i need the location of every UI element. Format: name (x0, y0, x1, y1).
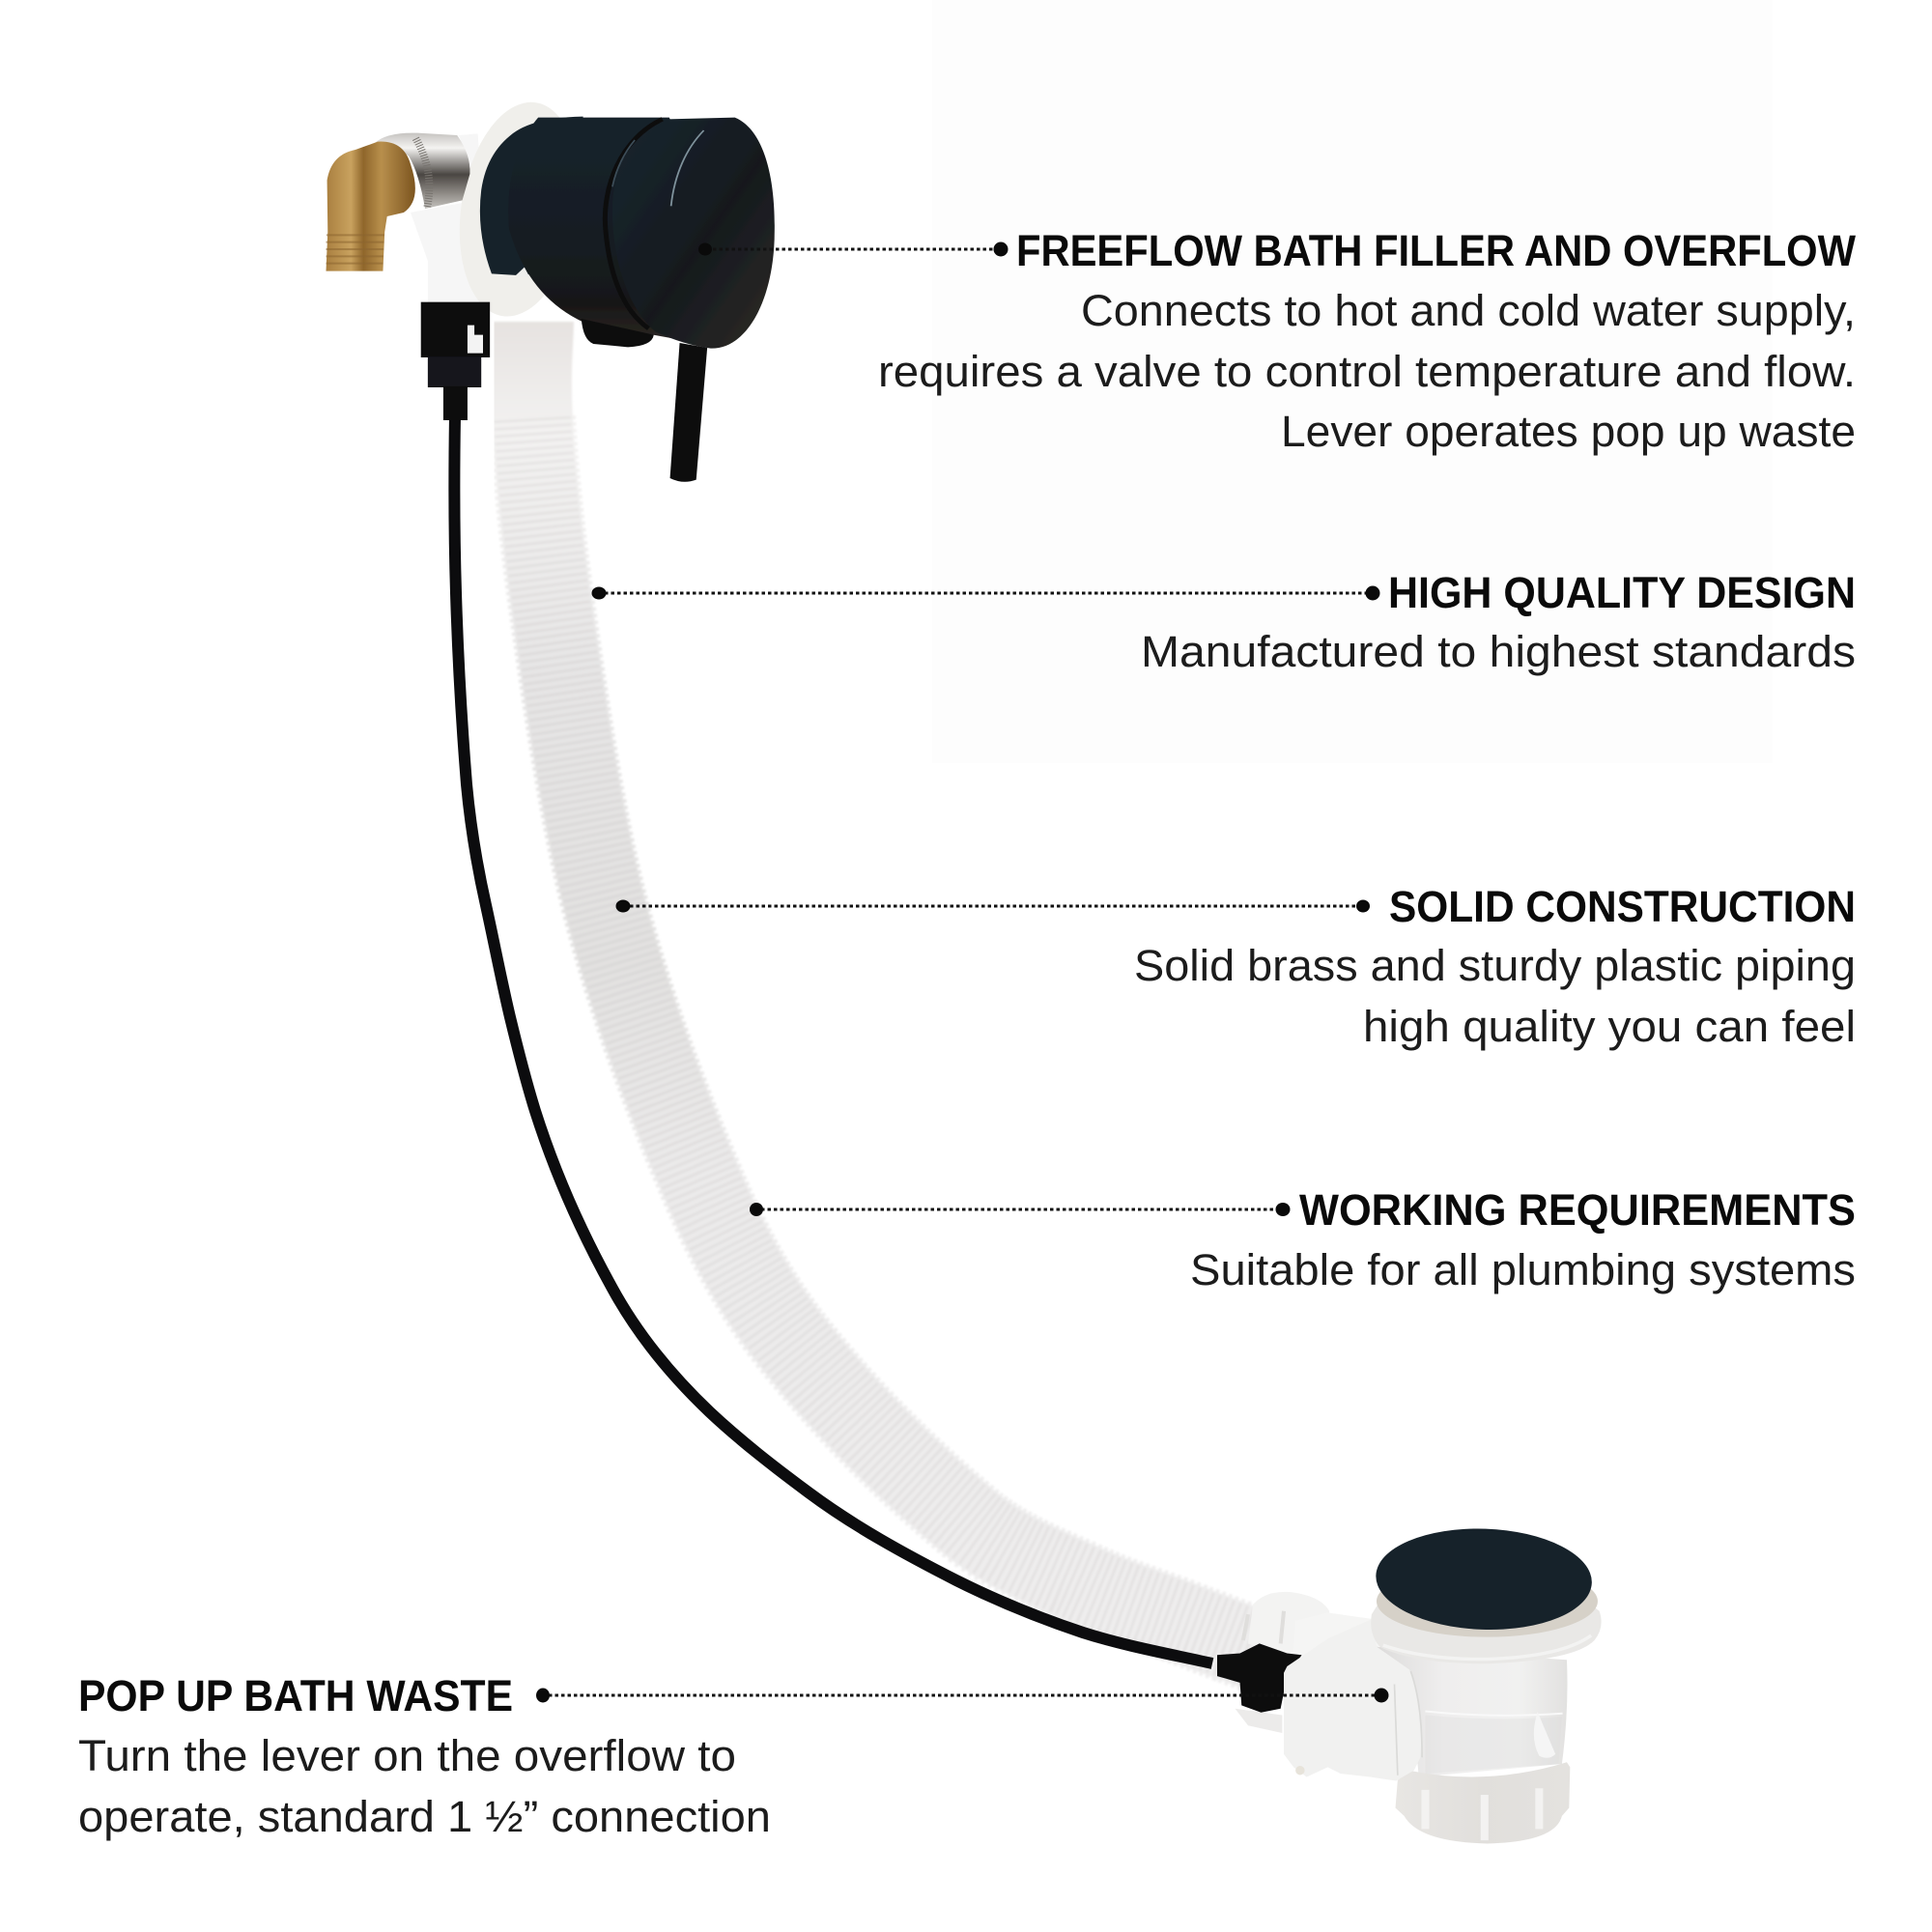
nut ribs (1425, 1788, 1539, 1840)
waste body cylinder (1377, 1647, 1568, 1776)
callout text: freeflow: FREEFLOW BATH FILLER AND OVERFLOW (1016, 226, 1856, 275)
collar ribs (1243, 1611, 1284, 1643)
callout text: freeflow: requires a valve to control temperature and flow. (878, 347, 1856, 396)
callout text: solid construction: Solid brass and sturdy plastic piping (1134, 941, 1856, 990)
callout text: freeflow: Connects to hot and cold water supply, (1081, 286, 1856, 335)
dark mounting ring (480, 117, 583, 275)
callout text: high quality (1141, 568, 1856, 676)
chrome nut (374, 133, 470, 209)
callout text: high quality: Manufactured to highest standards (1141, 627, 1856, 676)
clamping nut (1396, 1762, 1570, 1843)
small notch highlight (516, 268, 529, 277)
callout text: working requirements: WORKING REQUIREMENTS (1299, 1185, 1856, 1235)
callout text: pop up waste (78, 1671, 771, 1841)
box edge shading (1395, 1671, 1422, 1776)
callout text: freeflow: Lever operates pop up waste (1281, 407, 1856, 456)
lever handle (670, 343, 707, 482)
brass threads (326, 235, 384, 264)
product: corrugated waste hose (531, 322, 1265, 1654)
groove highlight (612, 140, 635, 186)
white mounting flange (445, 95, 593, 324)
callout text: working requirements: Suitable for all plumbing systems (1190, 1245, 1856, 1294)
body lower shade (1425, 1715, 1562, 1774)
callout text: pop up waste: operate, standard 1 ½” connection (78, 1792, 771, 1841)
side box housing (1284, 1619, 1421, 1781)
callout leader: working requirements (750, 1203, 1291, 1216)
black cable clip (1217, 1643, 1302, 1713)
plug inner seat (1377, 1566, 1598, 1637)
product: pop up waste assembly (1217, 1525, 1602, 1843)
callout text: pop up waste: Turn the lever on the overflow to (78, 1731, 736, 1780)
body ridge (1425, 1711, 1563, 1716)
valve end cap (612, 118, 775, 349)
callout text: freeflow (878, 226, 1856, 456)
product: black control cable (454, 415, 1212, 1663)
callout text: pop up waste: POP UP BATH WASTE (78, 1671, 513, 1720)
callout leader: high quality (591, 585, 1379, 601)
box drain pin (1295, 1766, 1305, 1775)
black cable clip (421, 302, 490, 420)
callout leader: pop up waste (536, 1689, 1389, 1702)
callout text: solid construction: SOLID CONSTRUCTION (1389, 882, 1856, 931)
callout text: high quality: HIGH QUALITY DESIGN (1388, 568, 1856, 617)
faint background panel (932, 0, 1773, 763)
callout text: solid construction (1134, 882, 1856, 1051)
lower clip support (1236, 1709, 1282, 1733)
plug black cap (1375, 1525, 1594, 1634)
underside port (582, 319, 654, 347)
callout leader: freeflow (698, 242, 1009, 257)
callout text: working requirements (1190, 1185, 1856, 1294)
hose collar (1248, 1592, 1329, 1660)
connecting stub (1292, 1612, 1379, 1666)
valve body (508, 118, 721, 340)
callout leader: solid construction (616, 900, 1370, 912)
flange light band (1383, 1635, 1591, 1660)
flange skirt (1371, 1592, 1602, 1663)
product: overflow valve assembly (326, 95, 775, 482)
white tee fitting (411, 133, 490, 309)
callout text: solid construction: high quality you can feel (1363, 1002, 1856, 1051)
body notch (1534, 1712, 1555, 1758)
knurled nut edge (415, 138, 429, 208)
brass elbow (326, 142, 415, 271)
cap highlight (671, 130, 704, 206)
groove between body and cap (605, 119, 663, 328)
